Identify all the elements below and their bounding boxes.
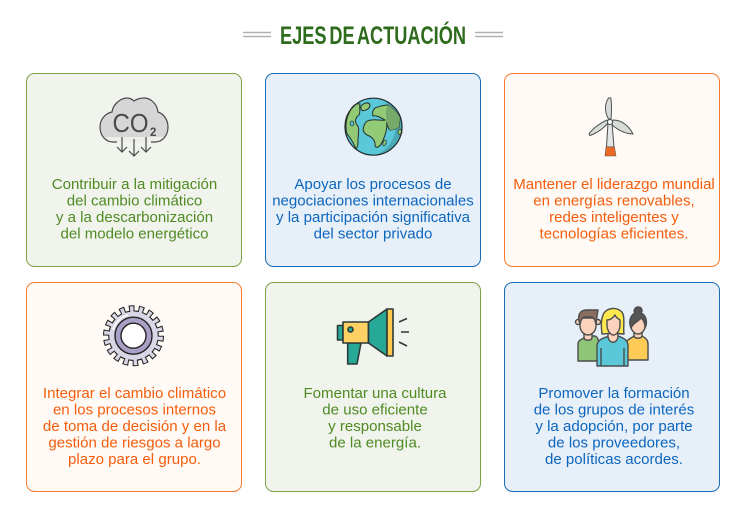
panel: mitigación <box>26 74 242 266</box>
icon: wind turbine <box>589 98 633 156</box>
icon: megaphone <box>338 309 409 364</box>
text block: negociaciones internacionales <box>272 192 474 210</box>
icon: people <box>576 307 648 366</box>
text block: plazo para el grupo. <box>68 451 201 468</box>
text block: de uso eficiente <box>322 402 428 418</box>
text block: Fomentar una cultura <box>303 385 447 402</box>
text block: Contribuir a la mitigación <box>52 176 217 193</box>
icon: CO2 cloud: CO <box>112 108 148 138</box>
icon: globe <box>345 98 402 155</box>
text block: gestión de riesgos a largo <box>48 434 221 452</box>
text block: de la energía. <box>329 434 421 452</box>
text block: y la adopción, por parte <box>535 418 693 435</box>
icon: CO2 cloud: 2 <box>150 127 156 139</box>
text block: Promover la formación <box>538 385 690 402</box>
left man <box>576 310 600 361</box>
text block: y responsable <box>328 418 422 435</box>
center woman <box>597 308 628 366</box>
text block: redes inteligentes y <box>549 209 679 226</box>
panel: negociaciones <box>266 74 480 266</box>
text block: de los grupos de interés <box>534 402 694 418</box>
right woman <box>626 307 648 360</box>
panel: riesgos <box>26 282 242 492</box>
text block: en los procesos internos <box>53 402 216 418</box>
text block: y la participación significativa <box>276 209 471 226</box>
text block: Apoyar los procesos de <box>294 176 452 193</box>
title: EJES DE ACTUACIÓN <box>280 20 466 50</box>
panel: cultura <box>266 282 480 492</box>
text block: del sector privado <box>314 226 432 242</box>
text block: Mantener el liderazgo mundial <box>513 176 715 193</box>
panel: formación <box>504 282 720 492</box>
text block: y a la descarbonización <box>56 209 213 226</box>
text block: Integrar el cambio climático <box>43 385 226 402</box>
text block: del cambio climático <box>67 192 202 210</box>
icon: CO2 cloud <box>100 98 168 156</box>
text block: de toma de decisión y en la <box>43 418 227 435</box>
panel: liderazgo <box>504 74 720 266</box>
icon: gear <box>107 309 160 362</box>
text block: en energías renovables, <box>533 192 695 210</box>
text block: del modelo energético <box>60 226 209 242</box>
text block: de los proveedores, <box>548 434 680 452</box>
text block: tecnologías eficientes. <box>540 226 688 242</box>
text block: de políticas acordes. <box>545 451 683 468</box>
